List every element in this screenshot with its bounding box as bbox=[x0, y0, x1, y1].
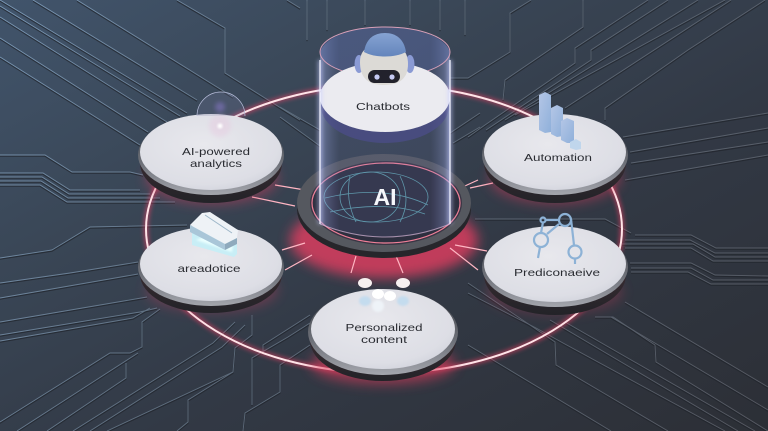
label: AI: AI bbox=[374, 184, 396, 210]
connector spokes bbox=[252, 180, 493, 273]
label: Personalized content: Personalized bbox=[346, 322, 423, 334]
icon: stacked blocks bbox=[190, 212, 238, 257]
disc: Automation bbox=[482, 92, 628, 204]
label: Automation: Automation bbox=[524, 152, 592, 164]
AI hub platform bbox=[297, 154, 471, 258]
hub circuit globe bbox=[324, 172, 428, 222]
disc: Prediction bbox=[482, 214, 628, 315]
disc: Personalized content bbox=[308, 278, 458, 384]
icon: linked nodes bbox=[534, 214, 582, 264]
label: AI-powered analytics bbox=[182, 146, 250, 170]
chatbots disc bbox=[320, 62, 450, 132]
label: areadotice: areadotice bbox=[178, 263, 241, 275]
icon: glass globe bbox=[197, 92, 245, 137]
label: AI-powered analytics: AI-powered bbox=[182, 146, 250, 158]
label: AI-powered analytics: analytics bbox=[190, 158, 242, 170]
label: Predictive: Prediconaeive bbox=[514, 267, 600, 279]
icon: robot bbox=[354, 33, 414, 85]
label: Personalized content bbox=[346, 322, 423, 346]
disc: areadotice bbox=[138, 212, 284, 313]
label: Chatbots: Chatbots bbox=[356, 101, 410, 113]
icon: bar chart bbox=[539, 92, 581, 150]
glow under hub bbox=[290, 202, 478, 278]
icon: glowing orbs bbox=[358, 278, 410, 312]
disc: AI-powered analytics bbox=[138, 92, 284, 204]
cylinder edges bbox=[320, 60, 450, 237]
label: Personalized content: content bbox=[361, 334, 407, 346]
chatbots glass cylinder bbox=[320, 27, 450, 237]
glowing ring bbox=[146, 85, 622, 373]
